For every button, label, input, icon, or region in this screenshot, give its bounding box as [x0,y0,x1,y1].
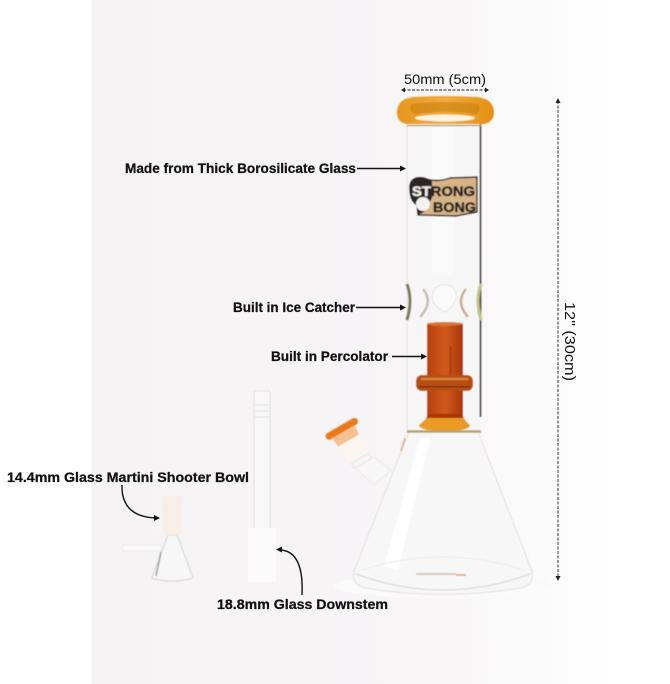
bong illustration [324,96,553,598]
label: downstem [217,546,388,612]
label: bowl [7,469,249,521]
label: ice catcher: Built in Ice Catcher [233,299,356,315]
label: width: 50mm (5cm) [404,72,486,87]
label: height: 12" (30cm) [561,302,577,381]
label: bowl: 14.4mm Glass Martini Shooter Bowl [7,469,249,485]
label: downstem: 18.8mm Glass Downstem [217,596,388,612]
logo: BONG [433,199,476,215]
logo [410,177,477,216]
side joint [324,415,393,494]
label: width [401,72,489,92]
main tube [406,120,481,432]
percolator [407,322,481,432]
label: height [556,98,577,581]
beaker base [333,432,553,598]
logo: STRONG [412,183,475,199]
label: borosilicate glass: Made from Thick Borosilicate Glass [125,160,356,176]
label: percolator: Built in Percolator [271,348,389,364]
amber rim [397,96,494,126]
ice catcher [407,284,481,320]
glass downstem [248,391,276,582]
martini shooter bowl [122,496,193,581]
